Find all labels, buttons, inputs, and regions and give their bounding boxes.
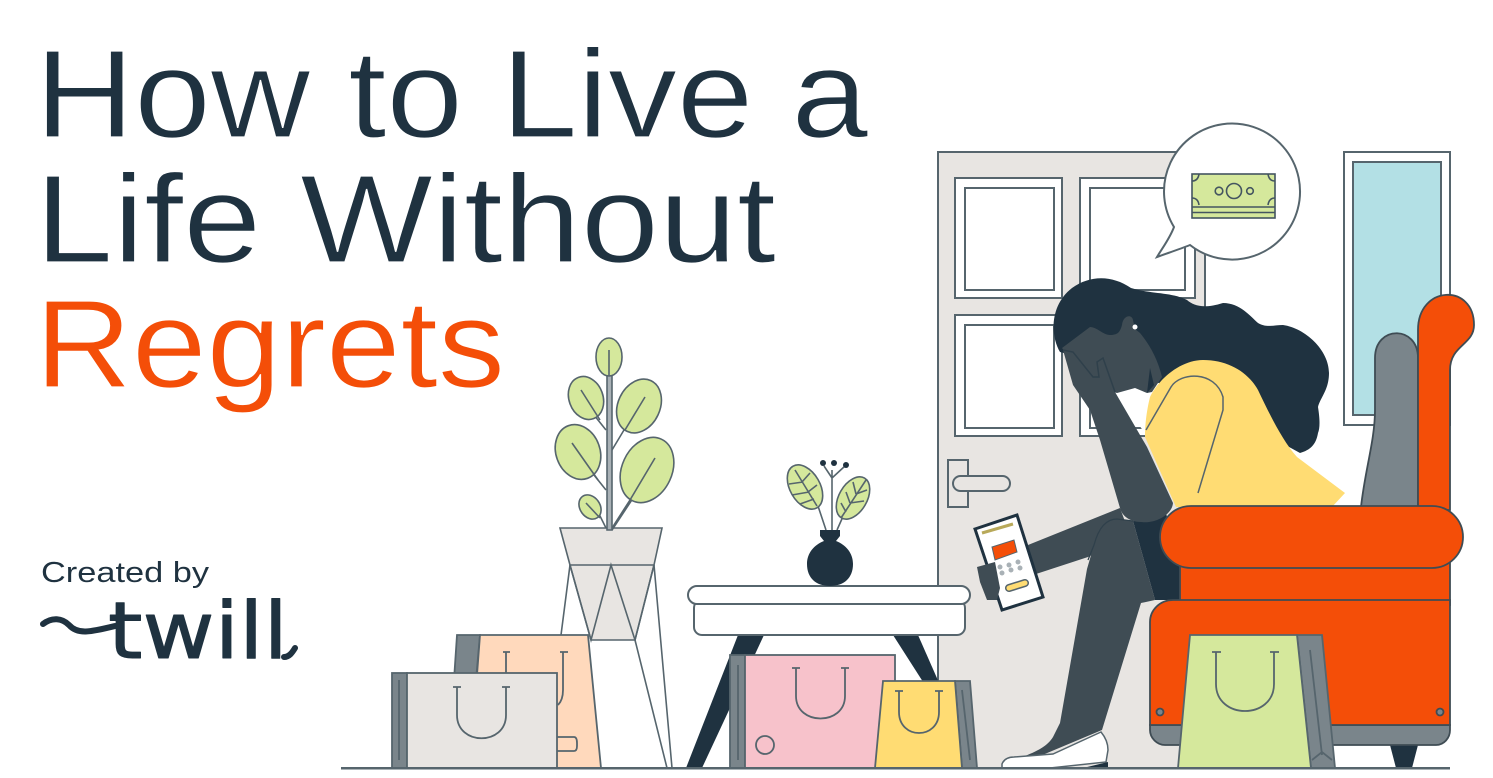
far leg: [1133, 513, 1180, 600]
woman: [1002, 278, 1345, 768]
shopping bag: pink: [730, 655, 895, 768]
floor line: [341, 767, 1450, 770]
created by credit: Created by: [41, 557, 210, 589]
twill logo: twill: [108, 587, 288, 677]
raised arm and hand: [1063, 350, 1173, 522]
armchair: [1150, 295, 1474, 768]
shopping bag: grey: [392, 673, 557, 768]
shirt sleeve outline: [1146, 376, 1223, 493]
arm roll: [1160, 506, 1463, 568]
pot: [560, 528, 662, 640]
head: [1062, 316, 1162, 393]
phone: [975, 515, 1043, 610]
twill logo: [43, 587, 295, 677]
title: Regrets: [35, 275, 505, 414]
door: [938, 152, 1205, 768]
speech bubble with money: [1157, 124, 1300, 260]
near leg: [1025, 519, 1155, 756]
chair body: [1180, 560, 1450, 605]
stems: [607, 370, 612, 530]
chair back wing: [1418, 295, 1474, 510]
shopping bag: peach: [454, 635, 601, 768]
table legs: [686, 635, 940, 768]
shoe: [1002, 732, 1108, 768]
chair back inner: [1361, 333, 1418, 507]
title: [35, 25, 869, 414]
vase with sprigs: [780, 459, 877, 586]
hair: [1054, 278, 1329, 453]
shirt: [1145, 360, 1345, 507]
shopping bag: green: [1178, 635, 1335, 768]
door handle: [948, 460, 1010, 507]
shopping bag: yellow: [875, 681, 977, 768]
chair base: [1390, 745, 1418, 768]
white gap under chin: [1117, 388, 1147, 435]
hand holding phone: [977, 562, 1000, 600]
icon: banknotes: [1192, 174, 1275, 218]
title: Life Without: [35, 150, 776, 289]
window: [1344, 152, 1450, 425]
leaves: [548, 338, 684, 523]
plant in pot on stand: [548, 338, 684, 768]
arm to phone: [1028, 508, 1130, 574]
table: [688, 586, 970, 635]
title: How to Live a: [35, 25, 869, 164]
